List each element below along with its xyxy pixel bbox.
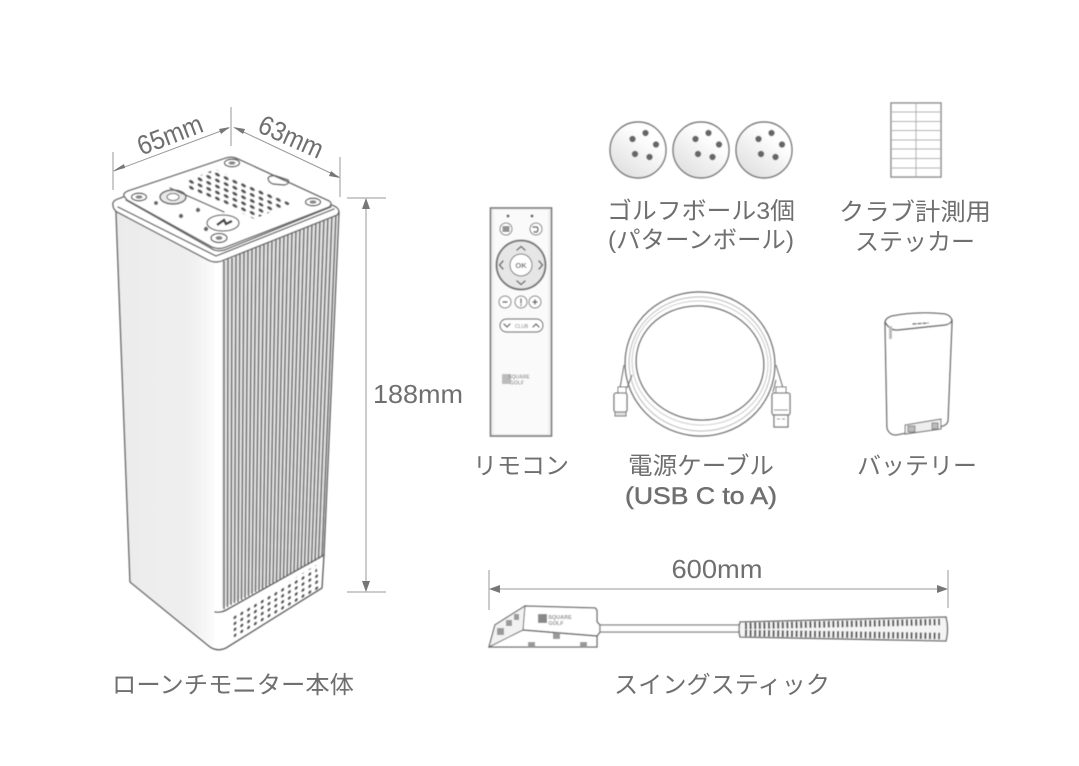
left face bbox=[116, 212, 214, 648]
label: sticker: ステッカー bbox=[855, 229, 975, 256]
dimension: depth 63mm: 63mm bbox=[254, 109, 328, 165]
speaker dots on base bbox=[233, 565, 321, 640]
screws bbox=[224, 159, 240, 167]
icon: club measurement sticker sheet bbox=[891, 103, 941, 177]
label: main unit: ローンチモニター本体 bbox=[112, 672, 354, 699]
dimension: depth 63mm bbox=[233, 109, 340, 197]
top plate bbox=[124, 157, 331, 248]
label: power cable bbox=[625, 453, 777, 510]
icon: swing stick: GOLF bbox=[548, 621, 564, 627]
icon: remote control: SQUARE bbox=[508, 374, 530, 380]
label: golf balls: ゴルフボール3個 bbox=[607, 198, 795, 225]
label: sticker: クラブ計測用 bbox=[839, 199, 991, 226]
dimension: width 65mm: 65mm bbox=[133, 109, 207, 161]
top lip bbox=[113, 158, 339, 262]
dimension: stick length 600mm bbox=[489, 554, 948, 610]
label: power cable: (USB C to A) bbox=[625, 483, 777, 510]
label: golf balls bbox=[607, 198, 795, 254]
label: swing stick: スイングスティック bbox=[614, 672, 830, 699]
label: remote: リモコン bbox=[473, 453, 569, 480]
icon: power cable bbox=[614, 282, 790, 446]
icon: battery bbox=[885, 313, 952, 435]
notch bbox=[268, 176, 288, 185]
label: golf balls: (パターンボール) bbox=[608, 227, 794, 254]
heat-sink fins bbox=[222, 212, 338, 608]
panel: launch monitor main unit bbox=[112, 107, 463, 699]
icon: golf balls bbox=[610, 122, 792, 178]
icon: launch monitor body bbox=[113, 157, 339, 650]
icon: remote control: OK bbox=[515, 261, 527, 270]
icon: swing stick bbox=[489, 606, 948, 647]
dimension: height 188mm bbox=[347, 198, 463, 592]
icon: remote control: GOLF bbox=[510, 380, 524, 386]
dimension: width 65mm bbox=[113, 107, 231, 190]
label: battery: バッテリー bbox=[857, 453, 977, 480]
dimension: height 188mm: 188mm bbox=[373, 379, 463, 409]
icon: remote control: CLUB bbox=[515, 324, 529, 330]
dimension: stick length 600mm: 600mm bbox=[672, 554, 762, 584]
label: sticker bbox=[839, 199, 991, 256]
lens and button bbox=[160, 190, 186, 204]
vent dots bbox=[187, 169, 293, 219]
label: power cable: 電源ケーブル bbox=[628, 453, 774, 480]
icon: remote control bbox=[490, 208, 552, 436]
icon: swing stick: SQUARE bbox=[548, 615, 572, 621]
